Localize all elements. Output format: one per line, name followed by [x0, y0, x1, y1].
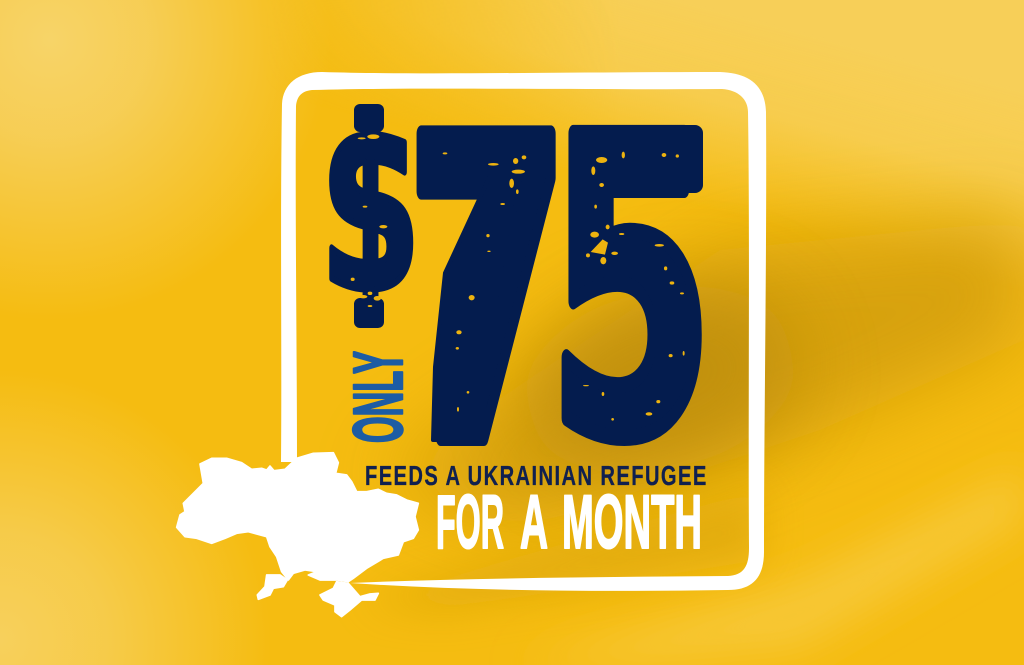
for a month: A	[520, 480, 548, 565]
for a month	[436, 480, 702, 565]
for a month: MONTH	[562, 480, 702, 565]
tagline: feeds a ukrainian refugee: FEEDS A UKRAINIAN REFUGEE	[365, 461, 706, 492]
white rough frame	[281, 72, 766, 591]
ukraine map silhouette	[177, 453, 418, 617]
for a month: FOR	[436, 480, 504, 565]
distress speckles on price	[351, 134, 685, 421]
price: dollar sign: $	[320, 69, 421, 346]
price: seven: 7	[406, 51, 570, 536]
text: ONLY	[339, 351, 417, 443]
price: five: 5	[548, 53, 714, 530]
